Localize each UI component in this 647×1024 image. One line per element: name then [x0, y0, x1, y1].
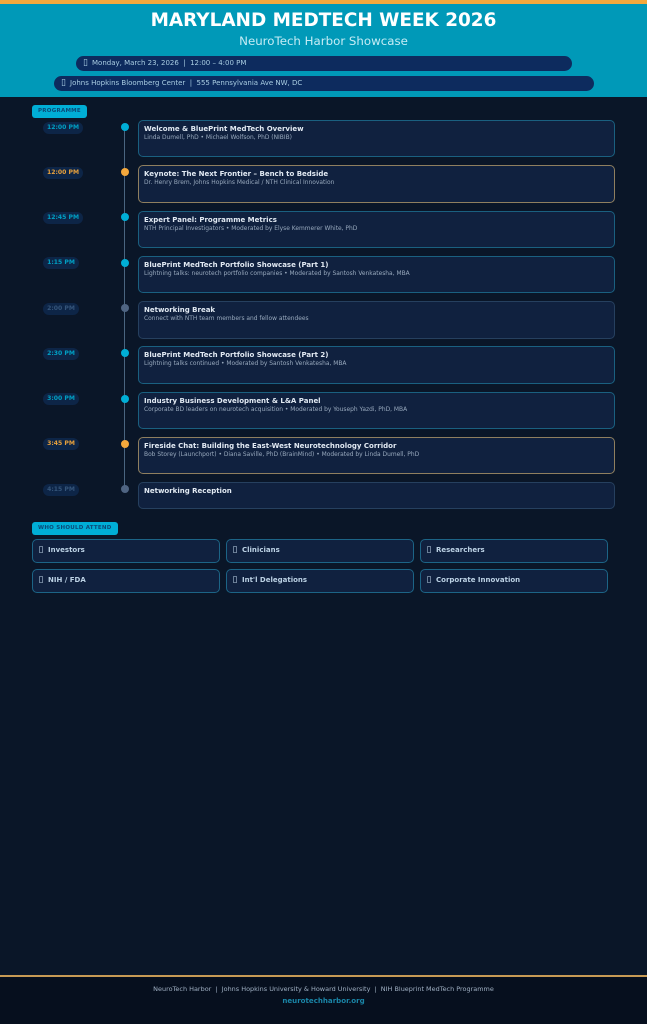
programme heading: PROGRAMME	[38, 108, 81, 114]
time: 12:00 PM	[47, 124, 79, 131]
audience card: international delegations: ▯	[232, 575, 237, 585]
time	[43, 484, 79, 496]
programme heading	[32, 105, 87, 118]
card	[138, 256, 615, 293]
session 5	[43, 301, 615, 339]
card: Connect with NTH team members and fellow attendees	[144, 315, 309, 322]
time: 2:00 PM	[47, 305, 75, 312]
who should attend heading	[32, 522, 118, 535]
audience card: international delegations	[226, 569, 414, 593]
audience card: NIH / FDA	[32, 569, 220, 593]
card	[138, 120, 615, 157]
session 8	[43, 437, 615, 474]
card	[138, 437, 615, 474]
card: Networking Reception	[144, 487, 232, 495]
time	[43, 438, 79, 450]
venue pill: Johns Hopkins Bloomberg Center | 555 Pennsylvania Ave NW, DC	[70, 79, 302, 87]
card	[138, 211, 615, 248]
time: 12:45 PM	[47, 214, 79, 221]
session 3	[43, 211, 615, 248]
card: Linda Dumell, PhD • Michael Wolfson, PhD (NIBIB)	[144, 134, 292, 141]
card	[138, 301, 615, 339]
card: NTH Principal Investigators • Moderated by Elyse Kemmerer White, PhD	[144, 225, 357, 232]
card: BluePrint MedTech Portfolio Showcase (Part 2)	[144, 351, 328, 359]
time: 3:00 PM	[47, 395, 75, 402]
timeline spine	[124, 127, 125, 489]
marker	[120, 485, 128, 493]
time: 1:15 PM	[47, 259, 75, 266]
title: MARYLAND MEDTECH WEEK 2026	[151, 10, 496, 31]
audience card: investors: Investors	[48, 546, 85, 554]
card: Lightning talks continued • Moderated by Santosh Venkatesha, MBA	[144, 360, 346, 367]
marker	[120, 168, 128, 176]
session 4	[43, 256, 615, 293]
subtitle: NeuroTech Harbor Showcase	[239, 34, 408, 48]
time: 12:00 PM	[47, 169, 79, 176]
audience card: corporate innovation	[420, 569, 608, 593]
footer credits: NeuroTech Harbor | Johns Hopkins University & Howard University | NIH Blueprint MedTech Programme	[153, 985, 494, 993]
marker	[120, 304, 128, 312]
audience card: corporate innovation: ▯	[426, 575, 431, 585]
time	[43, 348, 79, 360]
audience card: clinicians: Clinicians	[242, 546, 280, 554]
card: Welcome & BluePrint MedTech Overview	[144, 125, 304, 133]
date pill: ▯	[83, 58, 88, 68]
session 7	[43, 392, 615, 429]
time: 4:15 PM	[47, 486, 75, 493]
marker	[120, 123, 128, 131]
time	[43, 257, 79, 269]
time: 3:45 PM	[47, 440, 75, 447]
card: Fireside Chat: Building the East-West Neurotechnology Corridor	[144, 442, 396, 450]
card	[138, 392, 615, 429]
footer	[0, 975, 647, 1024]
card: Dr. Henry Brem, Johns Hopkins Medical / NTH Clinical Innovation	[144, 179, 334, 186]
marker	[120, 440, 128, 448]
date pill	[76, 56, 572, 71]
session 6	[43, 346, 615, 384]
top accent bar	[0, 0, 647, 4]
session 9	[43, 482, 615, 509]
card: Expert Panel: Programme Metrics	[144, 216, 277, 224]
session 2	[43, 165, 615, 203]
time	[43, 122, 83, 134]
session 1	[43, 120, 615, 157]
audience card: international delegations: Int'l Delegations	[242, 576, 307, 584]
time	[43, 167, 83, 179]
card: BluePrint MedTech Portfolio Showcase (Part 1)	[144, 261, 328, 269]
audience card: investors: ▯	[38, 545, 43, 555]
card: Bob Storey (Launchport) • Diana Saville, PhD (BrainMind) • Moderated by Linda Dumell, PhD	[144, 451, 419, 458]
time: 2:30 PM	[47, 350, 75, 357]
card: Industry Business Development & L&A Panel	[144, 397, 321, 405]
time	[43, 212, 83, 224]
venue pill	[54, 76, 594, 91]
audience card: clinicians	[226, 539, 414, 563]
time	[43, 393, 79, 405]
marker	[120, 394, 128, 402]
audience card: investors	[32, 539, 220, 563]
venue pill: ▯	[61, 78, 66, 88]
marker	[120, 349, 128, 357]
time	[43, 303, 79, 315]
audience card: researchers	[420, 539, 608, 563]
marker	[120, 213, 128, 221]
card: Networking Break	[144, 306, 215, 314]
audience card: researchers: Researchers	[436, 546, 485, 554]
card	[138, 482, 615, 509]
audience card: corporate innovation: Corporate Innovation	[436, 576, 520, 584]
card: Keynote: The Next Frontier – Bench to Bedside	[144, 170, 328, 178]
card: Lightning talks: neurotech portfolio companies • Moderated by Santosh Venkatesha, MBA	[144, 270, 410, 277]
date pill: Monday, March 23, 2026 | 12:00 – 4:00 PM	[92, 59, 246, 67]
audience card: NIH / FDA: ▯	[38, 575, 43, 585]
card	[138, 346, 615, 384]
audience card: NIH / FDA: NIH / FDA	[48, 576, 86, 584]
who should attend heading: WHO SHOULD ATTEND	[38, 525, 112, 531]
card	[138, 165, 615, 203]
marker	[120, 259, 128, 267]
audience card: clinicians: ▯	[232, 545, 237, 555]
audience card: researchers: ▯	[426, 545, 431, 555]
card: Corporate BD leaders on neurotech acquisition • Moderated by Youseph Yazdi, PhD, MBA	[144, 406, 407, 413]
header banner	[0, 4, 647, 97]
footer website: neurotechharbor.org	[282, 996, 365, 1005]
